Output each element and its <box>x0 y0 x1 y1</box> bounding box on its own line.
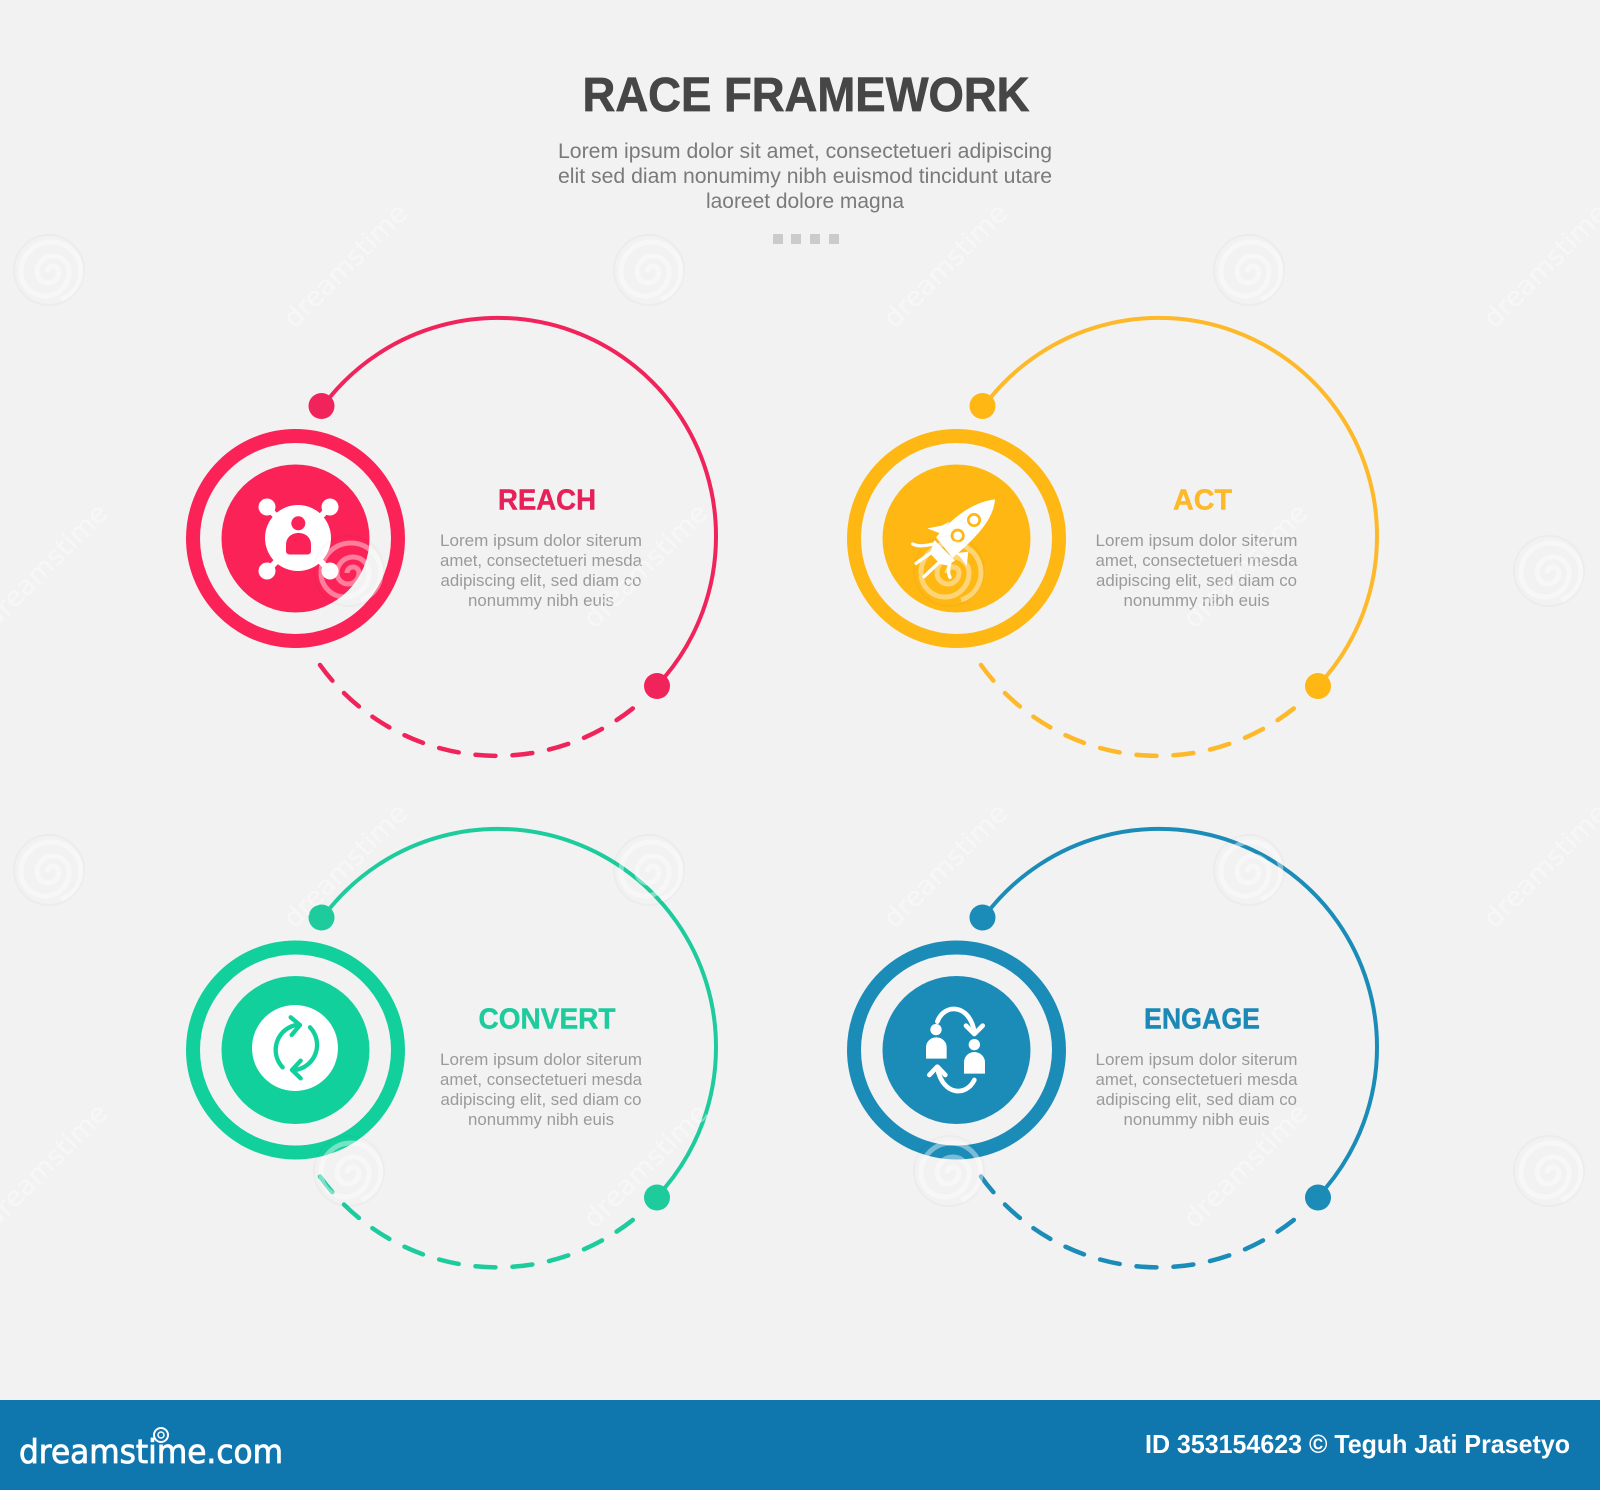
convert dashed arc <box>320 1176 637 1267</box>
reach dashed arc <box>320 665 637 756</box>
watermark overlay: dreamstime <box>278 198 414 334</box>
convert outer ring <box>193 948 398 1152</box>
reach body text: Lorem ipsum dolor siterum <box>440 531 642 550</box>
engage body text: amet, consectetueri mesda <box>1096 1070 1298 1089</box>
reach inner disc <box>222 464 370 612</box>
title: RACE FRAMEWORK <box>582 69 1030 122</box>
convert body text: Lorem ipsum dolor siterum <box>440 1050 642 1069</box>
subtitle text block: Lorem ipsum dolor sit amet, consectetueri adipiscing <box>558 140 1052 163</box>
engage solid arc <box>991 829 1377 1188</box>
act solid arc <box>991 318 1377 677</box>
engage body text: adipiscing elit, sed diam co <box>1096 1090 1297 1109</box>
engage body text <box>1096 1050 1298 1129</box>
engage body text: Lorem ipsum dolor siterum <box>1096 1050 1298 1069</box>
reach body text: amet, consectetueri mesda <box>440 551 643 570</box>
panel: engage <box>854 829 1377 1267</box>
reach outer ring <box>193 436 398 641</box>
panel: reach <box>193 318 716 756</box>
panel: act <box>854 318 1377 756</box>
act heading: ACT <box>1173 484 1232 516</box>
panel: convert <box>193 829 716 1267</box>
engage arc end dot <box>1305 1184 1331 1210</box>
act body text: nonummy nibh euis <box>1124 591 1270 610</box>
act dashed arc <box>981 665 1298 756</box>
reach heading: REACH <box>498 484 596 516</box>
subtitle text block: elit sed diam nonumimy nibh euismod tincidunt utare <box>558 165 1052 188</box>
engage arc start dot <box>970 904 996 930</box>
convert body text: nonummy nibh euis <box>468 1110 614 1129</box>
engage dashed arc <box>981 1176 1298 1267</box>
act inner disc <box>882 464 1030 612</box>
watermark overlay: dreamstime <box>878 198 1014 334</box>
watermark overlay <box>0 198 1600 1234</box>
act arc end dot <box>1305 673 1331 699</box>
convert body text: amet, consectetueri mesda <box>440 1070 643 1089</box>
reach solid arc <box>330 318 716 677</box>
icon: rocket <box>913 499 995 577</box>
act body text: adipiscing elit, sed diam co <box>1096 571 1297 590</box>
engage inner disc <box>882 976 1030 1124</box>
convert body text: adipiscing elit, sed diam co <box>440 1090 642 1109</box>
engage outer ring <box>854 948 1059 1152</box>
icon: people exchange <box>926 1009 985 1091</box>
footer logo: dreamstime.com <box>19 1432 283 1471</box>
act body text: Lorem ipsum dolor siterum <box>1096 531 1298 550</box>
reach body text: adipiscing elit, sed diam co <box>440 571 642 590</box>
icon: refresh arrows <box>252 1005 338 1091</box>
act body text: amet, consectetueri mesda <box>1096 551 1298 570</box>
convert body text <box>440 1050 643 1129</box>
subtitle text block <box>558 140 1052 213</box>
engage heading: ENGAGE <box>1144 1004 1260 1036</box>
watermark overlay: dreamstime <box>578 1098 714 1234</box>
act body text <box>1096 531 1298 610</box>
watermark overlay: dreamstime <box>1178 498 1314 634</box>
icon: reach network person <box>258 498 338 580</box>
footer credit: ID 353154623 © Teguh Jati Prasetyo <box>1145 1429 1570 1459</box>
convert inner disc <box>222 976 370 1124</box>
convert arc start dot <box>308 904 334 930</box>
act arc start dot <box>970 393 996 419</box>
reach arc end dot <box>644 673 670 699</box>
reach body text: nonummy nibh euis <box>468 591 614 610</box>
act outer ring <box>854 436 1059 641</box>
watermark overlay: dreamstime <box>578 498 714 634</box>
watermark overlay: dreamstime <box>278 798 414 934</box>
convert heading: CONVERT <box>478 1004 616 1036</box>
footer bar <box>0 1400 1600 1490</box>
four small squares under subtitle <box>773 234 839 244</box>
reach body text <box>440 531 643 610</box>
subtitle text block: laoreet dolore magna <box>706 190 904 213</box>
watermark overlay: dreamstime <box>1178 1098 1314 1234</box>
convert arc end dot <box>644 1184 670 1210</box>
convert solid arc <box>330 829 716 1188</box>
watermark overlay: dreamstime <box>878 798 1014 934</box>
engage body text: nonummy nibh euis <box>1124 1110 1270 1129</box>
reach arc start dot <box>308 393 334 419</box>
